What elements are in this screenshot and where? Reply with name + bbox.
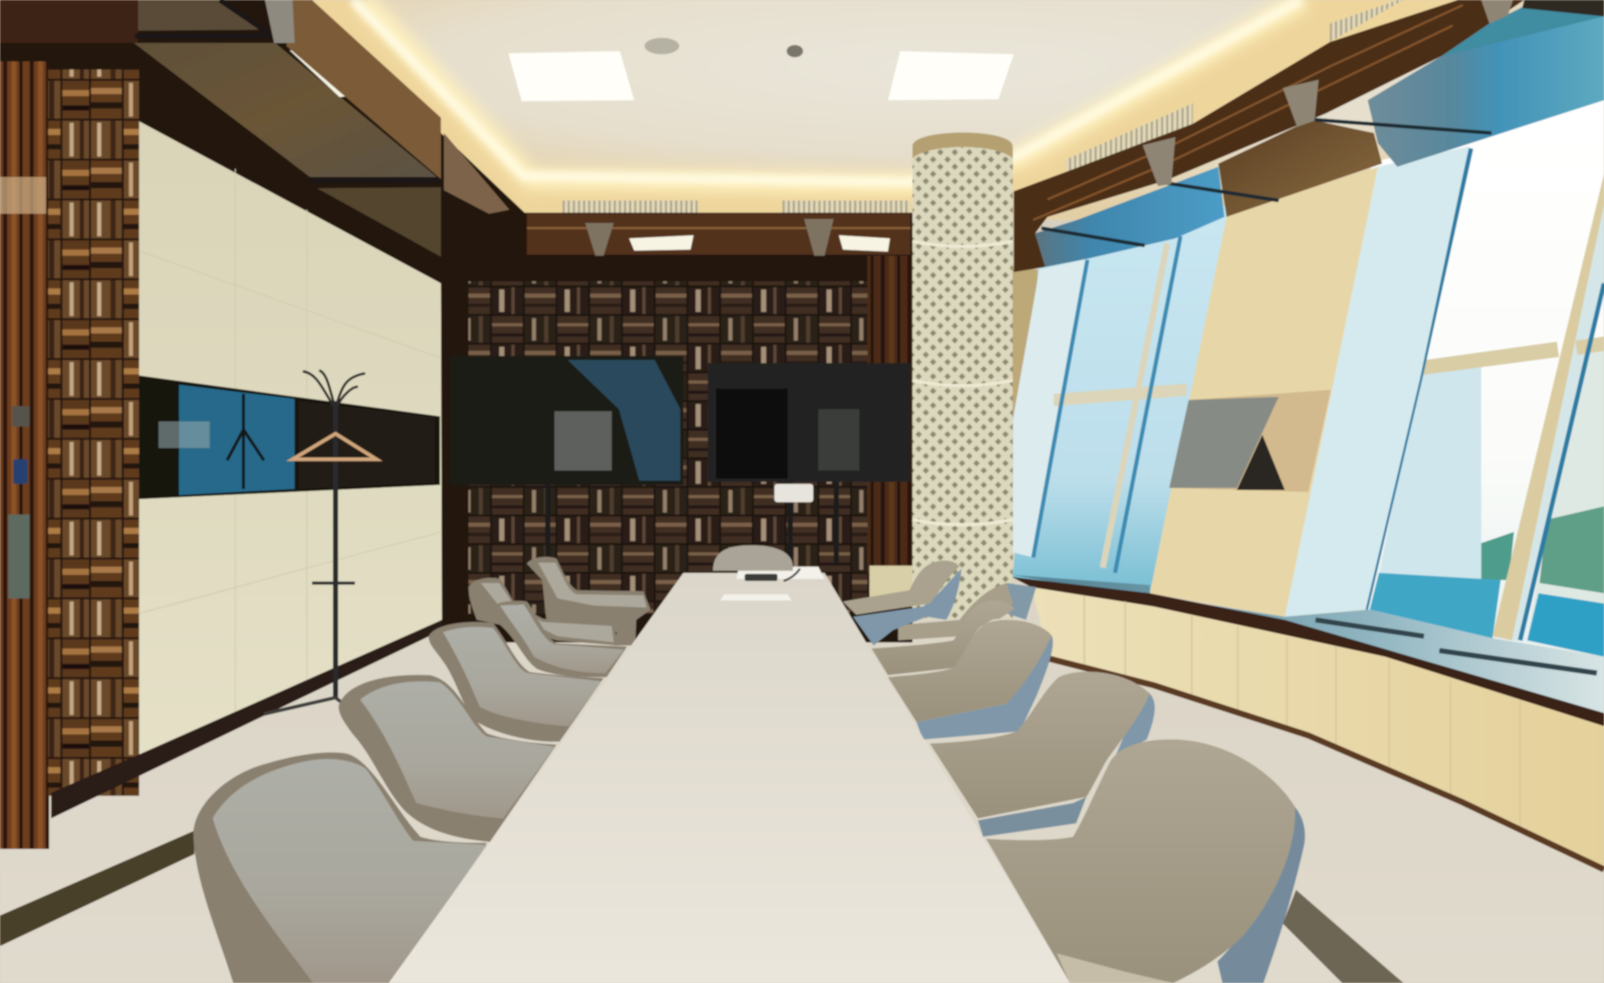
black glass band [138,375,440,499]
ceiling brackets [585,223,614,256]
chair L4 [487,601,627,677]
dark frame bars [1041,120,1491,245]
column cap [912,132,1013,159]
blue pier [1285,146,1469,617]
back wall [440,213,914,642]
sill edge [1012,577,1604,726]
grey brackets [1143,0,1513,186]
beige mullion left [1103,243,1167,568]
chair L2 [339,675,556,842]
glass reflection on door [0,177,46,214]
window lower views [1370,348,1604,657]
blue glass right [1368,16,1604,167]
window background right [1366,92,1604,696]
ceiling light left [508,51,634,101]
chair R1 [986,739,1305,983]
top glass [138,0,265,31]
cabinet joints [1084,595,1520,829]
back lights [629,235,694,251]
bracket [265,0,295,43]
left wall [0,0,527,849]
hanger [293,434,376,459]
soffit frame [310,177,441,183]
far end chair [713,545,793,571]
cove light [363,0,1304,184]
seat R1 [1057,953,1173,983]
corner wood [444,133,509,214]
white pier left [1013,259,1087,557]
glossy sill [1012,575,1604,713]
top frame [135,0,274,36]
vents [563,0,1404,214]
wood soffit [1014,0,1524,272]
sill streaks [1316,620,1597,673]
zebra wood column [0,61,49,849]
reflected coat stand [227,394,264,489]
wall panel joints [138,169,441,716]
top corner frame [1522,0,1604,16]
top wood [0,0,138,43]
ceiling speaker [644,38,679,54]
door controls [8,406,30,598]
cove light core [353,0,1301,182]
tan wall next to column [1008,266,1039,573]
wood band [489,214,910,255]
lower glass [317,187,441,257]
window frames [1410,174,1604,640]
right screen [708,363,910,482]
right wall and windows [1008,0,1604,869]
ceiling sensor [787,45,803,57]
cabinet base [1050,659,1604,869]
cream wall panel [134,119,442,755]
wood block wall [469,281,867,614]
large soffit [134,43,437,177]
mirror insert [1169,390,1331,492]
left screen [450,356,683,485]
dark structure [0,0,527,283]
right chairs [843,561,1305,983]
mullions left [1033,236,1180,573]
window background left [1013,205,1228,598]
baseboard [51,620,442,818]
blue band reflection [179,385,295,495]
beige panel behind chairs [870,566,914,607]
lower soffit [1218,120,1382,217]
upper wood strip [286,0,441,179]
chair L5 [469,578,618,645]
left chairs [193,557,651,983]
coat stand [264,370,376,714]
table [389,567,1070,983]
chair R2 [930,672,1155,837]
wood block column [48,70,139,796]
blue glass left [1035,167,1224,267]
screen stands and projector [545,482,839,564]
soffit light [289,50,358,97]
chair L1 [193,752,487,983]
floor inlays [0,831,1404,983]
chair R3 [888,620,1053,740]
chair R5 [898,583,1036,640]
ceiling [293,0,1604,220]
blue glass upper right [1441,6,1604,56]
chair R6 [843,561,962,645]
column [912,132,1013,619]
left window bars [1054,384,1187,406]
papers and microphone [720,567,825,600]
ceiling light right [888,51,1014,100]
band reflection highlight [159,421,210,448]
chair R4 [872,601,1015,675]
chair L3 [429,622,604,742]
cabinet [1031,587,1604,867]
beige pier [1150,167,1378,617]
chair L6 [527,557,651,645]
